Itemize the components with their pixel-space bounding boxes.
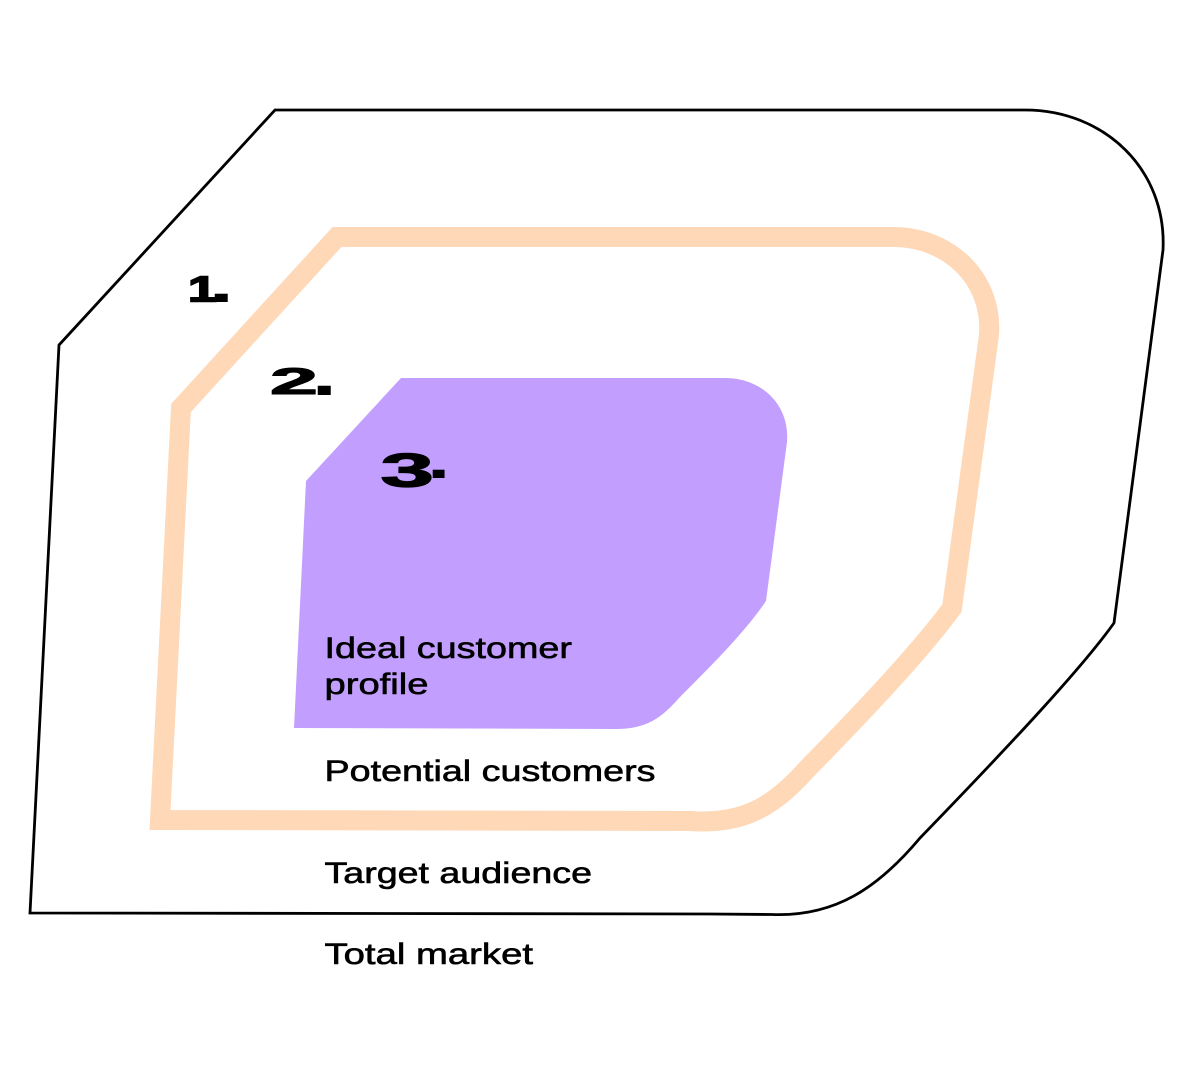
- number 3: 3: [380, 445, 434, 497]
- inner shape: ideal customer profile: [294, 378, 787, 729]
- number 2: 2: [270, 361, 318, 402]
- number 2: [270, 339, 337, 408]
- number 3: .: [427, 429, 450, 490]
- label: ideal customer profile: profile: [324, 668, 428, 701]
- label: total market: Total market: [324, 938, 534, 971]
- label: potential customers: Potential customers: [324, 755, 656, 788]
- label: target audience: Target audience: [324, 857, 592, 890]
- middle outline: target audience: [160, 237, 989, 822]
- number 1: .: [208, 253, 234, 314]
- label: ideal customer profile: [324, 632, 572, 701]
- number 2: .: [312, 339, 337, 408]
- label: ideal customer profile: Ideal customer: [324, 632, 572, 665]
- number 1: [188, 253, 234, 314]
- outer outline: total market: [30, 110, 1163, 915]
- number 1: 1: [188, 270, 217, 310]
- number 3: [380, 429, 450, 497]
